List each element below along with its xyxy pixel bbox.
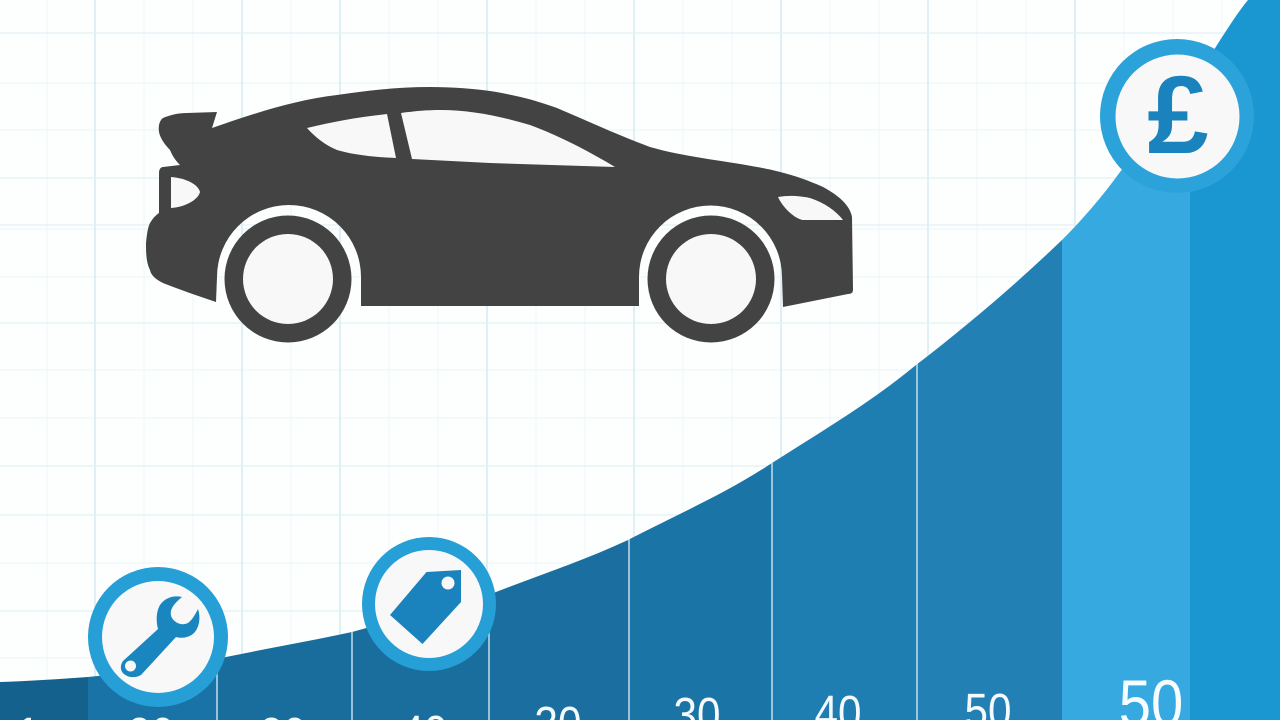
car front wheel (648, 216, 774, 342)
icon: wrench badge (88, 567, 228, 707)
icon: pound sign badge (1100, 39, 1254, 193)
icon: price tag badge (362, 537, 496, 671)
icon: pound sign badge: £ (1147, 54, 1209, 177)
car tail light (171, 177, 200, 208)
car rear window (307, 114, 396, 158)
car rear wheel (224, 216, 352, 342)
icon: car silhouette (146, 87, 853, 342)
car headlight (778, 196, 843, 220)
car front window (401, 110, 615, 167)
